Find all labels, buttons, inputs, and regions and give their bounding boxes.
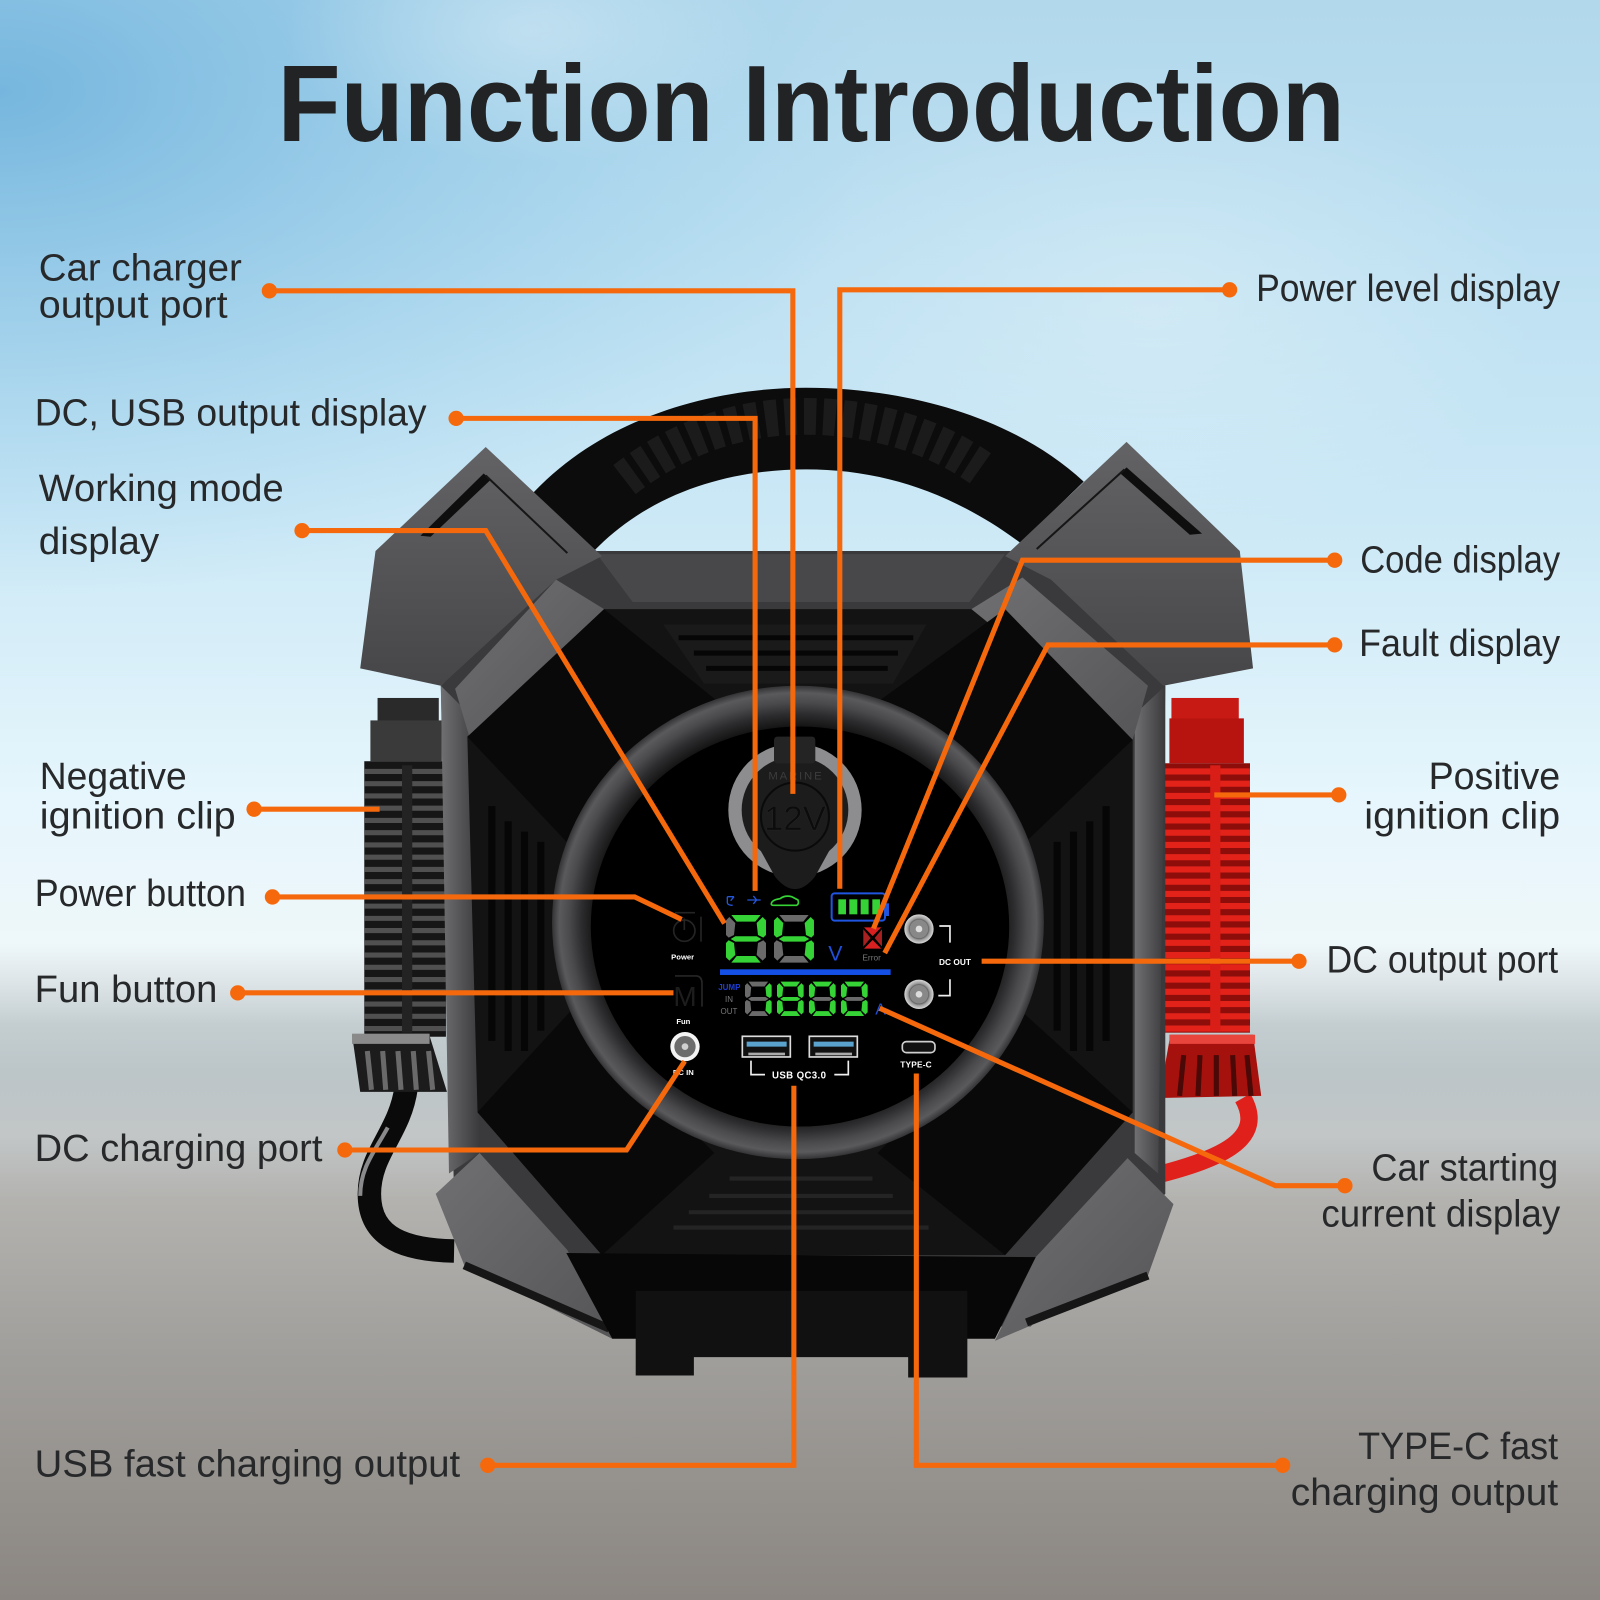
USB label: USB QC3.0 xyxy=(772,1070,826,1081)
DC out label: DC OUT xyxy=(939,957,971,967)
DC in port xyxy=(670,1032,700,1061)
upper-right facet xyxy=(971,578,1148,740)
callout: negative ignition clip: Negative xyxy=(40,755,187,797)
divider bar xyxy=(720,969,891,975)
diagonal block top-right xyxy=(878,609,1133,847)
battery level indicator xyxy=(832,893,889,921)
callout: car charger output port xyxy=(39,247,793,794)
callout: code display xyxy=(873,538,1560,929)
right side rail xyxy=(1135,686,1165,1173)
callout: TYPE-C fast charging output xyxy=(916,1073,1559,1513)
voltage unit: V xyxy=(828,942,843,966)
Type-C port xyxy=(902,1042,935,1053)
error code digit xyxy=(863,927,882,949)
callout: fun button xyxy=(35,968,673,1010)
callout: DC charging port xyxy=(35,1061,685,1169)
negative clip cable xyxy=(360,1088,454,1251)
DC and USB mode icons xyxy=(727,896,761,905)
callout: power level display xyxy=(840,267,1560,889)
callout: car starting current display xyxy=(880,1008,1560,1235)
callout: car starting current display: Car starting xyxy=(1371,1147,1558,1189)
DC in label: DC IN xyxy=(673,1068,694,1077)
current digit 3 xyxy=(809,982,836,1016)
callout: negative ignition clip xyxy=(40,755,380,837)
12V socket: 12V xyxy=(764,800,826,838)
callout: fault display: Fault display xyxy=(1359,622,1560,664)
callout: DC output port: DC output port xyxy=(1327,938,1559,980)
current digit 4 xyxy=(841,982,868,1016)
upper-left cap xyxy=(360,447,602,686)
handle xyxy=(529,388,1084,551)
body shell xyxy=(441,551,1165,1327)
callout: positive ignition clip xyxy=(1214,755,1560,837)
callout: working mode display xyxy=(39,467,724,923)
foot xyxy=(636,1291,967,1378)
callout: fun button: Fun button xyxy=(35,968,217,1010)
power button xyxy=(674,913,701,942)
current digit 2 xyxy=(777,982,804,1016)
lower edge slots xyxy=(464,1265,1148,1329)
current unit: A xyxy=(875,1002,886,1019)
upper-right cap xyxy=(1005,442,1253,686)
Type-C label: TYPE-C xyxy=(900,1060,932,1070)
callout: working mode display: Working mode xyxy=(39,467,284,509)
left side rail xyxy=(441,686,480,1173)
lower-left corner xyxy=(436,1153,612,1339)
top band xyxy=(597,554,1005,602)
callout: code display: Code display xyxy=(1360,538,1560,580)
error label: Error xyxy=(862,953,881,963)
diagonal block bottom-left xyxy=(478,1010,714,1255)
control panel, drawn in crop coordinates xyxy=(670,737,971,1081)
black control face xyxy=(591,727,1009,1127)
diagonal block bottom-right xyxy=(878,1010,1133,1255)
bottom vent xyxy=(673,1179,929,1228)
display ring xyxy=(552,686,1044,1159)
DC out port 2 xyxy=(904,980,934,1009)
callout: power button xyxy=(35,872,682,919)
mode labels: OUT xyxy=(721,1007,738,1016)
jump starter device xyxy=(352,388,1261,1378)
USB port 1 xyxy=(742,1036,790,1057)
callout: fault display xyxy=(885,622,1560,953)
upper-left facet xyxy=(455,580,604,737)
callout: power level display: Power level display xyxy=(1256,267,1560,309)
callout: DC, USB output display xyxy=(35,392,755,891)
fun button: M xyxy=(673,981,697,1012)
current digit 1 xyxy=(745,982,772,1016)
positive clip cable xyxy=(1155,1098,1249,1176)
callout: positive ignition clip: Positive xyxy=(1429,755,1560,797)
callout: positive ignition clip: ignition clip xyxy=(1364,795,1560,837)
callout: DC, USB output display: DC, USB output display xyxy=(35,392,427,434)
callout: car charger output port: output port xyxy=(39,283,228,325)
left vent xyxy=(492,806,541,1051)
callout: TYPE-C fast charging output: charging output xyxy=(1291,1471,1559,1513)
bottom trapezoid xyxy=(566,1253,1036,1339)
USB port 2 xyxy=(809,1036,857,1057)
callout: TYPE-C fast charging output: TYPE-C fast xyxy=(1358,1425,1559,1467)
DC out brackets xyxy=(938,926,950,996)
DC out port 1 xyxy=(904,914,934,944)
black front panel xyxy=(467,609,1133,1255)
diagonal block top-left xyxy=(467,609,718,847)
power label: Power xyxy=(671,952,694,961)
right vent xyxy=(1057,806,1106,1051)
callout: negative ignition clip: ignition clip xyxy=(40,795,236,837)
callout: car charger output port: Car charger xyxy=(39,247,242,289)
voltage digit 1 xyxy=(726,915,766,963)
12V socket xyxy=(728,737,862,889)
callout: DC charging port: DC charging port xyxy=(35,1127,323,1169)
mode labels: IN xyxy=(725,995,733,1004)
negative ignition clip xyxy=(352,698,447,1092)
mode labels xyxy=(718,983,741,1016)
top vent xyxy=(663,624,927,684)
12V socket: MARINE xyxy=(768,770,822,782)
car mode icon xyxy=(771,896,798,905)
fun label: Fun xyxy=(676,1017,691,1026)
voltage digit 2 xyxy=(774,915,814,963)
callout: working mode display: display xyxy=(39,520,159,562)
positive ignition clip xyxy=(1159,698,1261,1098)
callout: USB fast charging output: USB fast charging output xyxy=(35,1443,461,1485)
callout: DC output port xyxy=(982,938,1559,980)
title: Function Introduction xyxy=(278,43,1345,164)
callout: USB fast charging output xyxy=(35,1086,794,1485)
mode labels: JUMP xyxy=(718,983,741,992)
lower-right corner xyxy=(995,1158,1173,1341)
callout: car starting current display: current display xyxy=(1321,1193,1560,1235)
callout: power button: Power button xyxy=(35,872,246,914)
USB bracket xyxy=(751,1061,848,1075)
